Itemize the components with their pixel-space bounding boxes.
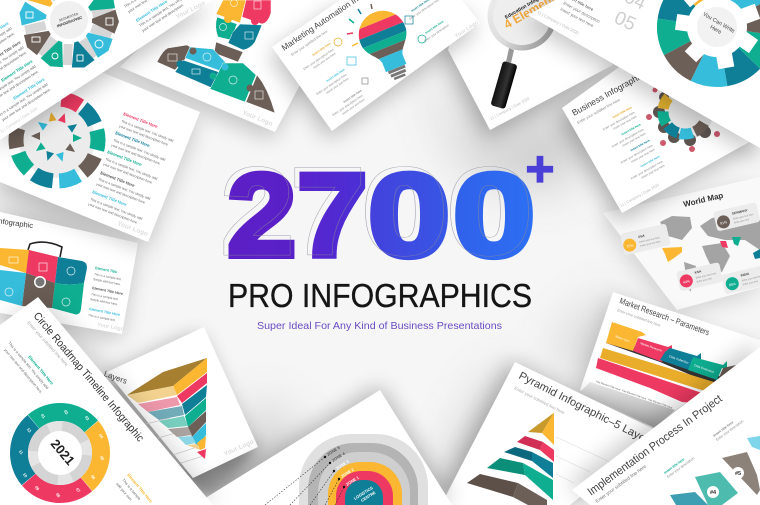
text rows: Insert title here bbox=[640, 154, 661, 168]
card background bbox=[528, 0, 760, 148]
number fill bbox=[227, 149, 535, 282]
element text blocks: Element Title Here bbox=[92, 286, 123, 296]
key element labels: Key Element Title Here bbox=[622, 389, 647, 401]
panel: implementation process card bbox=[568, 341, 760, 505]
right text rows: Insert title here bbox=[424, 19, 445, 35]
step text bbox=[663, 419, 744, 479]
zone labels: ZONE 1 bbox=[345, 475, 360, 487]
footer: 11 | Company | Date 2020 bbox=[537, 9, 580, 36]
card background bbox=[0, 31, 200, 242]
callout: USA 75%: USA bbox=[638, 233, 646, 239]
plus sign: + bbox=[525, 141, 555, 197]
donut year label: 2021 bbox=[48, 436, 78, 468]
left text rows: Enter your description here bbox=[302, 47, 335, 71]
heading: World Map bbox=[682, 191, 724, 209]
text blocks: This is a sample text. You simply add bbox=[98, 177, 151, 201]
panel: big wheel card bbox=[524, 0, 760, 156]
yellow parameter band bbox=[600, 348, 714, 392]
text blocks: This is a sample text. You simply add bbox=[113, 138, 166, 162]
step badge #4 bbox=[707, 486, 719, 498]
panel: business infographic card bbox=[558, 45, 760, 221]
guide lines bbox=[146, 418, 203, 463]
center text: You Can Write bbox=[702, 12, 735, 35]
left text rows: insert your text here bbox=[341, 97, 366, 116]
grey connectors bbox=[24, 0, 114, 65]
callout: Germany 91% bbox=[713, 202, 760, 231]
process step: teal bbox=[660, 348, 701, 371]
right text rows: Enter your description bbox=[423, 23, 450, 43]
callout: India 95%: Enter your text bbox=[742, 280, 759, 286]
zone labels: ZONE 3 bbox=[335, 459, 350, 471]
briefcase body bbox=[0, 248, 87, 314]
text blocks left: Element Title Here bbox=[0, 58, 34, 83]
panel: briefcase card bbox=[0, 212, 138, 340]
callout: USA 75%: Enter your text here bbox=[640, 240, 662, 248]
segment ring bbox=[653, 0, 760, 91]
stack layer: red tip bbox=[197, 449, 206, 459]
numbers bbox=[611, 0, 649, 35]
callout: Germany 91%: Enter your text bbox=[734, 218, 750, 225]
subtitle: Enter your subtitled line here bbox=[290, 29, 328, 57]
panel: segmented wheel card bbox=[0, 0, 213, 148]
arrow step: grey brown bbox=[722, 452, 760, 495]
text blocks: Element Title Here bbox=[92, 189, 128, 207]
heading: Layers bbox=[103, 369, 128, 386]
donut segment labels bbox=[18, 409, 106, 499]
concentric zones bbox=[299, 434, 428, 505]
bulb rays bbox=[347, 4, 372, 46]
zone labels: ZONE 2 bbox=[340, 467, 355, 479]
callout: USA 75%: Enter your text here bbox=[639, 236, 661, 244]
logo: Your Logo bbox=[116, 220, 149, 238]
left text rows: insert your text here bbox=[325, 76, 350, 95]
magnifier neck bbox=[506, 48, 514, 63]
panel: world map card bbox=[599, 177, 760, 316]
text block: top: This is a sample text. You simply add bbox=[7, 341, 49, 390]
text blocks: This is a sample text. You simply add bbox=[121, 119, 174, 143]
card background bbox=[200, 390, 452, 505]
footer: 11 | Company | Date 2020 bbox=[620, 183, 660, 208]
leader dots bbox=[324, 456, 345, 488]
left text rows: Insert title here bbox=[342, 88, 363, 104]
stack layer: yellow bbox=[187, 436, 206, 450]
text rows: Enter your description here bbox=[620, 143, 654, 164]
text block: right: Element Title Here bbox=[126, 472, 154, 504]
stack layer: brown bbox=[168, 411, 206, 437]
element text blocks: Simply add text here. bbox=[90, 297, 118, 306]
wheel segments bbox=[18, 0, 119, 71]
text blocks: Element Title Here bbox=[100, 170, 136, 188]
process step: brown bbox=[718, 365, 736, 380]
briefcase handle bbox=[28, 242, 62, 257]
text blocks: This is a sample text. You simply add bbox=[105, 157, 158, 181]
callout: Germany 91%: GERMANY bbox=[731, 208, 749, 216]
step badge #5: #5 bbox=[735, 471, 741, 477]
text block: top: Element Title Here bbox=[27, 354, 55, 386]
puzzle person bbox=[157, 0, 275, 113]
heading: Market Research – Parameters bbox=[618, 295, 711, 337]
text block: right: This is a sample bbox=[121, 478, 141, 501]
logo: Your Logo bbox=[97, 322, 125, 333]
zone labels: ZONE 5 bbox=[326, 445, 341, 457]
panel: circle roadmap timeline card bbox=[0, 293, 219, 505]
footer: 11 | Company | Date 2020 bbox=[0, 107, 38, 134]
callout: KSA 44%: KSA bbox=[694, 269, 702, 275]
pyramid layer: teal bbox=[504, 447, 553, 478]
world map shapes bbox=[660, 214, 760, 292]
number fill: 7 bbox=[297, 149, 367, 281]
subtitle: Enter your subtitled line here bbox=[595, 464, 648, 505]
number fill: 2 bbox=[227, 149, 296, 281]
text rows: Insert title here bbox=[612, 105, 633, 119]
callout: India 95%: 95% bbox=[729, 282, 736, 287]
callout: USA 75%: 75% bbox=[626, 243, 634, 249]
step labels bbox=[615, 334, 715, 374]
subheading: Super Ideal For Any Kind of Business Presentations bbox=[257, 320, 502, 332]
number fill: 0 bbox=[368, 150, 450, 282]
text blocks: your own text and description here. bbox=[119, 124, 169, 147]
dark shadow band bbox=[606, 338, 722, 384]
element text blocks: Simply add text here. bbox=[93, 277, 121, 286]
guide lines bbox=[556, 437, 610, 483]
text rows: Enter your description here bbox=[611, 127, 645, 148]
callout: Germany 91%: 91% bbox=[720, 220, 728, 226]
pyramid layer: brown bbox=[467, 474, 547, 505]
subtitle: Enter your subtitled line here bbox=[577, 98, 621, 125]
red parameter row bbox=[596, 358, 702, 403]
step labels: Market Research bbox=[640, 341, 663, 353]
insert title text: insert your text here bbox=[560, 6, 595, 29]
left text rows: Insert title here bbox=[311, 41, 332, 57]
text rows: insert your text here bbox=[630, 147, 656, 164]
white gear bbox=[675, 0, 760, 69]
donut chart 2021 bbox=[2, 395, 118, 505]
element text blocks: Element Title bbox=[95, 266, 117, 274]
panel: element circle card bbox=[0, 31, 200, 250]
stack layer: green bbox=[159, 398, 206, 428]
logo: Your Logo bbox=[241, 109, 274, 128]
text rows bbox=[602, 105, 666, 180]
card background bbox=[603, 177, 760, 310]
arrow step: light green bbox=[695, 472, 738, 505]
numbers: 05 bbox=[611, 7, 639, 35]
center label: CENTRE bbox=[360, 490, 377, 503]
left text rows: Enter your description here bbox=[315, 72, 348, 96]
text blocks: Element Title Here bbox=[107, 149, 143, 167]
arrow step: teal-blue bbox=[670, 492, 708, 505]
pyramid layer: yellow bbox=[528, 413, 554, 445]
text block: right bbox=[115, 472, 154, 504]
red dots bbox=[646, 88, 720, 152]
element text blocks: Element Title Here bbox=[89, 307, 120, 317]
card background bbox=[572, 347, 760, 505]
step text: Enter your description bbox=[715, 419, 744, 442]
soft grey background shading bbox=[0, 60, 620, 500]
step badge #4: #4 bbox=[710, 490, 717, 496]
text blocks: your own text and description here. bbox=[111, 143, 161, 166]
light bulb bbox=[358, 10, 406, 80]
process step: green bbox=[688, 357, 727, 380]
text block: right: add your own bbox=[115, 482, 133, 502]
stack layer: cyan bbox=[178, 423, 206, 447]
text blocks: your own text and description here. bbox=[96, 182, 146, 205]
center label: LOGISTICS bbox=[353, 485, 374, 501]
right text rows bbox=[408, 0, 450, 43]
donut segment labels: 08 bbox=[55, 492, 62, 499]
card background bbox=[580, 292, 760, 427]
callout: KSA 44%: Enter your text here bbox=[696, 272, 717, 280]
heading: Circle Roadmap Timeline Infographic bbox=[31, 310, 146, 445]
left text rows: insert your text here bbox=[312, 51, 337, 70]
logo: Your Logo bbox=[454, 20, 480, 40]
panel: market research card bbox=[577, 292, 760, 432]
heading: Pyramid Infographic–5 Layers bbox=[517, 370, 656, 449]
text block: top: your own text and description here. bbox=[3, 348, 43, 395]
left text rows: Insert title here bbox=[325, 67, 346, 83]
card background bbox=[562, 45, 760, 213]
donut segment labels: 09 bbox=[34, 485, 41, 492]
panel: puzzle person card bbox=[117, 0, 345, 140]
left text rows: Enter your description here bbox=[331, 93, 364, 117]
step text: Insert title here bbox=[663, 457, 685, 475]
step labels: Data Collection bbox=[669, 354, 689, 365]
text blocks: your own text and description here. bbox=[88, 202, 138, 225]
text rows: Insert title here bbox=[630, 138, 651, 152]
donut segment labels: 01 bbox=[40, 413, 47, 420]
step text: Enter your description bbox=[666, 456, 695, 479]
text blocks left bbox=[0, 20, 52, 122]
panel: pyramid five layers card bbox=[435, 362, 660, 505]
wheel center text: INFOGRAPHIC bbox=[56, 16, 83, 28]
donut segment labels: 02 bbox=[63, 409, 70, 416]
magnifier lens bbox=[488, 0, 556, 50]
wheel center disc bbox=[50, 1, 88, 39]
card background bbox=[0, 212, 138, 334]
text blocks bbox=[88, 111, 174, 225]
inner arrowheads bbox=[31, 111, 82, 163]
card background bbox=[448, 0, 613, 130]
process step: red bbox=[633, 338, 672, 362]
key element labels: Key Element Title Here bbox=[596, 380, 621, 392]
stack layer: red bbox=[138, 373, 207, 412]
element text blocks: This is a sample text. bbox=[94, 272, 122, 281]
insert title text: Enter your description bbox=[563, 0, 601, 24]
heading: pro infographics: PRO INFOGRAPHICS bbox=[228, 277, 532, 314]
text rows: insert your text here bbox=[612, 114, 638, 131]
text blocks right: your own text and description. bbox=[141, 3, 185, 33]
donut segment labels: 10 bbox=[22, 472, 29, 479]
map highlights bbox=[662, 237, 760, 262]
card background bbox=[0, 297, 213, 505]
panel: magnifier card bbox=[444, 0, 613, 138]
callout: India 95%: INDIA bbox=[740, 272, 750, 278]
pyramid layer: red bbox=[517, 436, 554, 462]
outer segments bbox=[0, 82, 115, 198]
subtitle: Enter your subtitled line here bbox=[617, 308, 661, 328]
step labels: Status Quo bbox=[615, 334, 630, 343]
step labels: Data Evaluation bbox=[694, 363, 715, 374]
callout: USA 75% bbox=[620, 223, 671, 255]
card background bbox=[441, 362, 660, 505]
callout: KSA 44%: Enter your text bbox=[696, 277, 713, 284]
text rows: Enter your description here bbox=[602, 110, 636, 131]
number fill: 0 bbox=[453, 150, 535, 282]
segment wheel bbox=[653, 82, 715, 146]
dashed leader lines bbox=[265, 457, 344, 505]
center text: Here bbox=[709, 25, 722, 36]
card background bbox=[272, 0, 480, 131]
text blocks: Element Title Here bbox=[115, 130, 151, 148]
donut segment labels: 12 bbox=[26, 427, 33, 434]
donut segment labels: 05 bbox=[99, 455, 106, 462]
process step: yellow bbox=[606, 322, 646, 351]
donut segment labels: 03 bbox=[84, 415, 91, 422]
donut segment labels: 04 bbox=[98, 433, 105, 440]
key element labels bbox=[596, 380, 673, 410]
element text blocks: This is a sample text. bbox=[88, 313, 116, 322]
main number 2700+ bbox=[224, 156, 554, 260]
left icons bbox=[334, 38, 368, 84]
heading: Implementation Process In Project bbox=[586, 392, 725, 498]
wheel center text: SEGMENTED bbox=[58, 11, 79, 22]
center disc bbox=[697, 7, 737, 47]
card background bbox=[120, 0, 345, 132]
grey parameter row bbox=[580, 382, 675, 428]
element text blocks bbox=[88, 266, 123, 322]
right icons bbox=[405, 16, 426, 43]
pyramid layer: green bbox=[487, 458, 553, 500]
card background bbox=[0, 0, 213, 140]
callout: Germany 91%: Enter your text here bbox=[733, 213, 755, 221]
text blocks left: your own text and description here. bbox=[1, 87, 52, 122]
logo: Your Logo bbox=[175, 0, 206, 21]
callout: KSA 44%: 44% bbox=[683, 279, 690, 285]
stack layer: top bbox=[127, 358, 207, 403]
text rows: insert your text here bbox=[621, 131, 647, 148]
inner disc bbox=[19, 102, 95, 178]
arrow step: cyan bbox=[747, 436, 760, 450]
text blocks left: Element Title Here bbox=[12, 76, 46, 101]
subtitle: Enter your subtitled line here bbox=[514, 385, 566, 416]
element text blocks: This is a sample text. bbox=[91, 292, 119, 301]
puzzle knobs bbox=[176, 15, 259, 92]
text blocks: This is a sample text. You simply add bbox=[90, 197, 143, 221]
stack layer: teal bbox=[148, 385, 207, 420]
left text rows bbox=[302, 41, 366, 117]
donut segment labels: 06 bbox=[90, 474, 97, 481]
callout: KSA 44% bbox=[676, 262, 723, 291]
footer: 11 | Company | Date 2020 bbox=[490, 97, 530, 121]
briefcase icons bbox=[5, 257, 75, 306]
subtitle: Enter your subtitled line here bbox=[26, 320, 69, 367]
text blocks: Element Title Here bbox=[123, 111, 159, 129]
card background bbox=[107, 327, 258, 478]
step badge #5 bbox=[732, 467, 744, 479]
panel: marketing automation card bbox=[269, 0, 480, 139]
number outline bbox=[224, 166, 529, 256]
text blocks right bbox=[123, 0, 185, 33]
logo: Your Logo bbox=[223, 438, 255, 458]
zone labels bbox=[326, 445, 360, 487]
donut segment labels: 07 bbox=[75, 487, 82, 494]
text rows: Enter your description here bbox=[630, 159, 664, 180]
text rows: insert your text here bbox=[640, 163, 666, 180]
donut segment labels: 11 bbox=[18, 449, 25, 456]
panel: 3D pyramid card bbox=[101, 327, 258, 486]
key element labels: Key Element Title Here bbox=[648, 398, 673, 410]
zone labels: ZONE 4 bbox=[331, 451, 346, 463]
text rows: Insert title here bbox=[621, 122, 642, 136]
wheel icons bbox=[26, 12, 113, 61]
heading: Business Infographic bbox=[570, 70, 645, 118]
panel: zone onion card bbox=[200, 386, 452, 505]
puzzle icons bbox=[168, 0, 263, 99]
text blocks: your own text and description here. bbox=[103, 162, 153, 185]
step text: Insert title here bbox=[712, 420, 734, 438]
callout: India 95% bbox=[721, 265, 760, 294]
magnifier handle bbox=[490, 61, 518, 109]
